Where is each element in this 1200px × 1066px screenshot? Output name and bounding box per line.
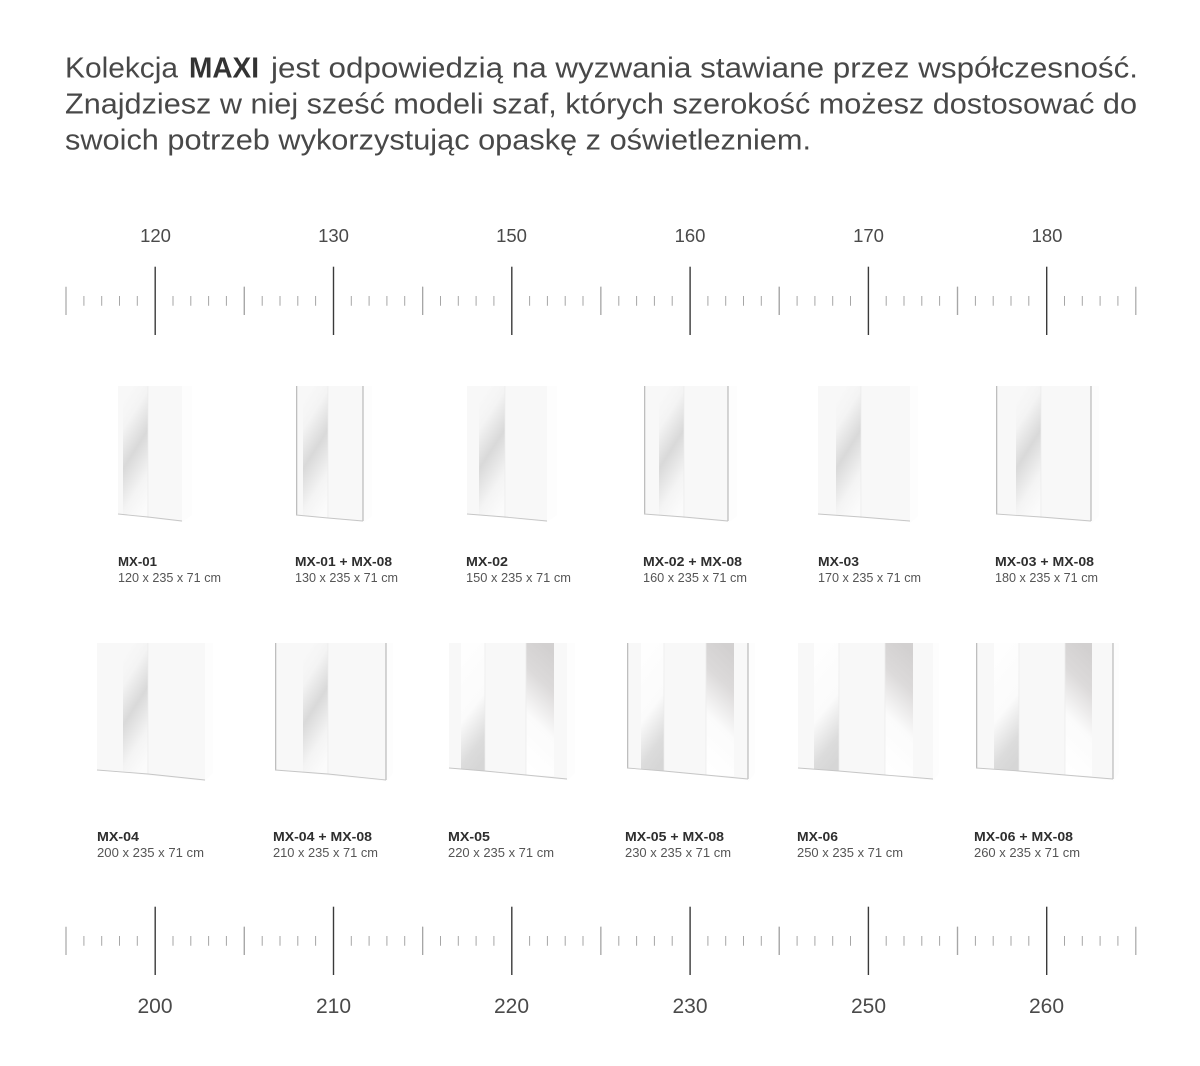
wardrobe MX-02 + MX-08: [643, 386, 747, 585]
wardrobe MX-06 + MX-08: [974, 643, 1119, 860]
wardrobe MX-05: 220 x 235 x 71 cm: [448, 845, 554, 860]
wardrobe MX-05: MX-05: [448, 829, 490, 844]
headline text: [65, 52, 1138, 156]
wardrobe MX-02: MX-02: [466, 554, 508, 569]
wardrobe MX-01 + MX-08: [295, 386, 398, 585]
bottom width ruler: 250: [851, 995, 886, 1018]
wardrobe MX-06: MX-06: [797, 829, 838, 844]
wardrobe MX-05 + MX-08: MX-05 + MX-08: [625, 829, 724, 844]
wardrobe MX-02 + MX-08: 160 x 235 x 71 cm: [643, 570, 747, 585]
top width ruler: 170: [853, 225, 884, 246]
wardrobe MX-04: 200 x 235 x 71 cm: [97, 845, 204, 860]
wardrobe MX-02: [466, 386, 571, 585]
wardrobe MX-04: [97, 643, 213, 860]
headline text: swoich potrzeb wykorzystując opaskę z oświetlezniem.: [65, 124, 811, 156]
bottom width ruler: 260: [1029, 995, 1064, 1018]
headline text: Znajdziesz w niej sześć modeli szaf, których szerokość możesz dostosować do: [65, 88, 1137, 120]
bottom width ruler: 210: [316, 995, 351, 1018]
wardrobe MX-03 + MX-08: [995, 386, 1099, 585]
wardrobe MX-03: MX-03: [818, 554, 859, 569]
wardrobe MX-05: [448, 643, 575, 860]
bottom width ruler: 220: [494, 995, 529, 1018]
wardrobe MX-03: [818, 386, 921, 585]
top width ruler: 180: [1032, 225, 1062, 246]
top width ruler: 160: [675, 225, 705, 246]
wardrobe MX-05 + MX-08: [625, 643, 755, 860]
wardrobe MX-05 + MX-08: 230 x 235 x 71 cm: [625, 845, 731, 860]
top width ruler: 120: [140, 225, 171, 246]
wardrobe MX-03: 170 x 235 x 71 cm: [818, 570, 921, 585]
top width ruler: [66, 225, 1136, 335]
wardrobe MX-04: MX-04: [97, 829, 140, 844]
headline text: MAXI: [189, 52, 259, 84]
wardrobe MX-04 + MX-08: MX-04 + MX-08: [273, 829, 372, 844]
wardrobe MX-03 + MX-08: MX-03 + MX-08: [995, 554, 1094, 569]
wardrobe MX-01: 120 x 235 x 71 cm: [118, 570, 221, 585]
wardrobe MX-02: 150 x 235 x 71 cm: [466, 570, 571, 585]
bottom width ruler: 200: [137, 995, 173, 1018]
top width ruler: 130: [318, 225, 349, 246]
headline text: Kolekcja: [65, 52, 179, 84]
wardrobe MX-06: 250 x 235 x 71 cm: [797, 845, 903, 860]
headline text: jest odpowiedzią na wyzwania stawiane przez współczesność.: [270, 52, 1138, 84]
wardrobe MX-06 + MX-08: MX-06 + MX-08: [974, 829, 1073, 844]
wardrobe MX-01: MX-01: [118, 554, 157, 569]
bottom width ruler: [66, 907, 1136, 1018]
wardrobe MX-04 + MX-08: 210 x 235 x 71 cm: [273, 845, 378, 860]
wardrobe MX-03 + MX-08: 180 x 235 x 71 cm: [995, 570, 1098, 585]
wardrobe MX-06: [797, 643, 939, 860]
wardrobe MX-04 + MX-08: [273, 643, 393, 860]
wardrobe MX-01 + MX-08: 130 x 235 x 71 cm: [295, 570, 398, 585]
wardrobe MX-01: [118, 386, 221, 585]
wardrobe MX-02 + MX-08: MX-02 + MX-08: [643, 554, 742, 569]
wardrobe MX-01 + MX-08: MX-01 + MX-08: [295, 554, 392, 569]
top width ruler: 150: [496, 225, 527, 246]
bottom width ruler: 230: [672, 995, 708, 1018]
wardrobe MX-06 + MX-08: 260 x 235 x 71 cm: [974, 845, 1080, 860]
